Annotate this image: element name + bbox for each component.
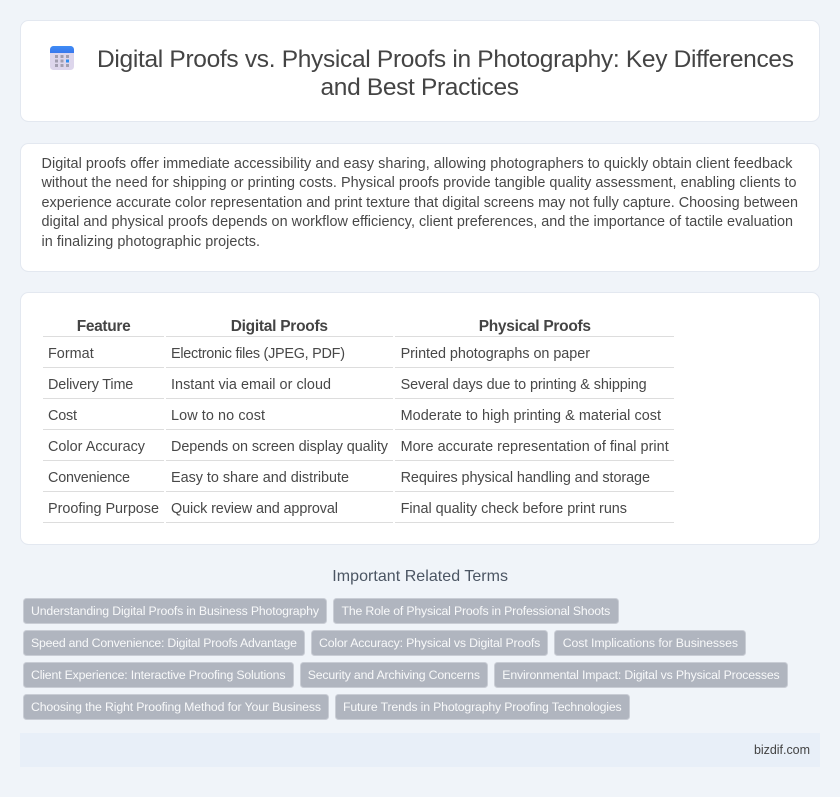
intro paragraph: digital and physical proofs depends on workflow efficiency, client preferences, and the importance of tactile evaluation — [42, 214, 793, 230]
tag: Environmental Impact: Digital vs Physical Processes — [502, 668, 780, 682]
row: proofing purpose: Quick review and approval — [171, 501, 338, 517]
tag: Understanding Digital Proofs in Business Photography — [31, 604, 320, 618]
row: format — [43, 346, 674, 368]
row: proofing purpose: Final quality check before print runs — [401, 501, 627, 517]
row: convenience — [43, 470, 674, 492]
tag — [334, 598, 618, 624]
tag — [24, 662, 294, 688]
tag: Color Accuracy: Physical vs Digital Proofs — [319, 636, 540, 650]
tag: Speed and Convenience: Digital Proofs Advantage — [31, 636, 297, 650]
tag — [312, 630, 548, 656]
icon: calendar — [50, 46, 74, 70]
tag — [300, 662, 488, 688]
title: Digital Proofs vs. Physical Proofs in Photography: Key Differences — [97, 46, 794, 73]
intro paragraph: experience accurate color representation and print texture that digital screens may not fully capture. Choosing between — [42, 195, 798, 211]
tag: Cost Implications for Businesses — [563, 636, 738, 650]
row: color accuracy — [43, 439, 674, 461]
row: delivery time: Delivery Time — [48, 377, 133, 393]
table header row — [43, 318, 674, 337]
tag — [24, 598, 326, 624]
row: proofing purpose: Proofing Purpose — [48, 501, 159, 517]
row: color accuracy: More accurate representation of final print — [401, 439, 669, 455]
footer — [20, 733, 820, 767]
title: and Best Practices — [320, 74, 519, 101]
tag: Client Experience: Interactive Proofing Solutions — [31, 668, 286, 682]
heading: important related terms: Important Related Terms — [332, 568, 508, 585]
row: convenience: Easy to share and distribute — [171, 470, 349, 486]
title — [97, 46, 794, 101]
tag — [494, 662, 788, 688]
tag: The Role of Physical Proofs in Professional Shoots — [342, 604, 610, 618]
tag: Future Trends in Photography Proofing Technologies — [343, 700, 622, 714]
row: cost: Cost — [48, 408, 77, 424]
table header row: Physical Proofs — [479, 318, 591, 335]
table header row: Feature — [77, 318, 131, 335]
row: delivery time: Instant via email or cloud — [171, 377, 331, 393]
tag — [554, 630, 746, 656]
row: cost: Low to no cost — [171, 408, 265, 424]
tag — [24, 630, 304, 656]
intro paragraph: without the need for shipping or printing costs. Physical proofs provide tangible quality assessment, enabling clients to — [40, 175, 796, 191]
row: convenience: Convenience — [48, 470, 130, 486]
row: delivery time — [43, 377, 674, 399]
intro paragraph — [40, 156, 798, 250]
tag list — [24, 598, 788, 720]
row: format: Printed photographs on paper — [401, 346, 590, 362]
row: proofing purpose — [43, 501, 674, 523]
row: format: Format — [48, 346, 94, 362]
tag — [336, 694, 630, 720]
panel: introduction — [20, 144, 820, 272]
row: color accuracy: Color Accuracy — [48, 439, 146, 455]
row: convenience: Requires physical handling and storage — [401, 470, 650, 486]
table header row: Digital Proofs — [231, 318, 328, 335]
intro paragraph: in finalizing photographic projects. — [42, 234, 260, 250]
tag — [24, 694, 328, 720]
panel: comparison table — [20, 292, 820, 544]
tag: Security and Archiving Concerns — [308, 668, 480, 682]
row: color accuracy: Depends on screen display quality — [171, 439, 389, 455]
row: delivery time: Several days due to printing & shipping — [401, 377, 647, 393]
row: format: Electronic files (JPEG, PDF) — [171, 346, 345, 362]
footer source text: bizdif.com — [754, 743, 810, 757]
panel: title header — [20, 20, 820, 122]
intro paragraph: Digital proofs offer immediate accessibility and easy sharing, allowing photographers to quickly obtain client feedback — [42, 156, 793, 172]
row: cost: Moderate to high printing & material cost — [401, 408, 661, 424]
row: cost — [43, 408, 674, 430]
tag: Choosing the Right Proofing Method for Your Business — [31, 700, 321, 714]
